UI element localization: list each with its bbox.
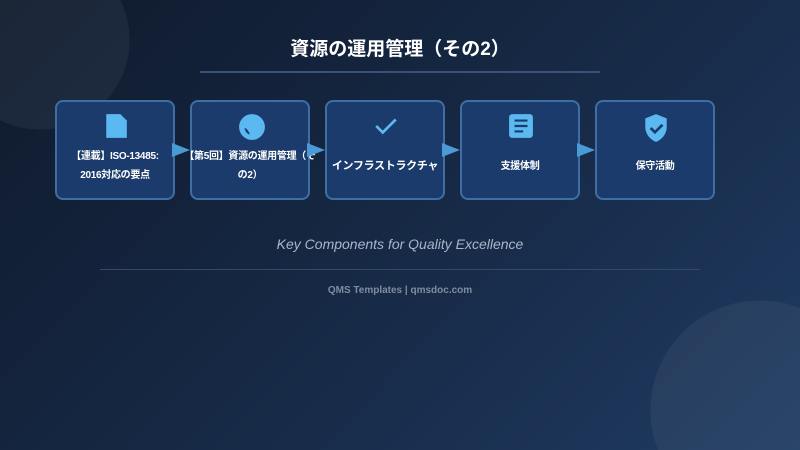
title: 資源の運用管理（その2） xyxy=(290,39,510,60)
label 5: 保守活動 xyxy=(636,160,674,172)
arrow 3 xyxy=(442,143,460,157)
icon: shield xyxy=(645,114,667,142)
label 1: 【連載】ISO-13485: xyxy=(71,151,159,162)
box 1 xyxy=(55,100,175,200)
box 4 xyxy=(460,100,580,200)
icon: circle xyxy=(239,114,265,140)
box 2 xyxy=(190,100,310,200)
arrow 2 xyxy=(307,143,325,157)
label 1: 2016対応の要点 xyxy=(80,170,150,181)
icon: document xyxy=(106,114,128,138)
box 5 xyxy=(595,100,715,200)
box 3 xyxy=(325,100,445,200)
label 4: 支援体制 xyxy=(501,160,539,172)
subtitle: Key Components for Quality Excellence xyxy=(277,236,523,252)
arrow 1 xyxy=(172,143,190,157)
label 2: の2） xyxy=(238,170,262,181)
arrow 4 xyxy=(577,143,595,157)
label 2 xyxy=(184,150,316,181)
label 3: インフラストラクチャ xyxy=(332,160,438,172)
footer: QMS Templates | qmsdoc.com xyxy=(328,285,472,296)
label 2: 【第5回】資源の運用管理（そ xyxy=(184,151,316,162)
icon: check xyxy=(375,118,397,134)
label 1 xyxy=(71,150,159,181)
icon: list xyxy=(509,114,533,138)
